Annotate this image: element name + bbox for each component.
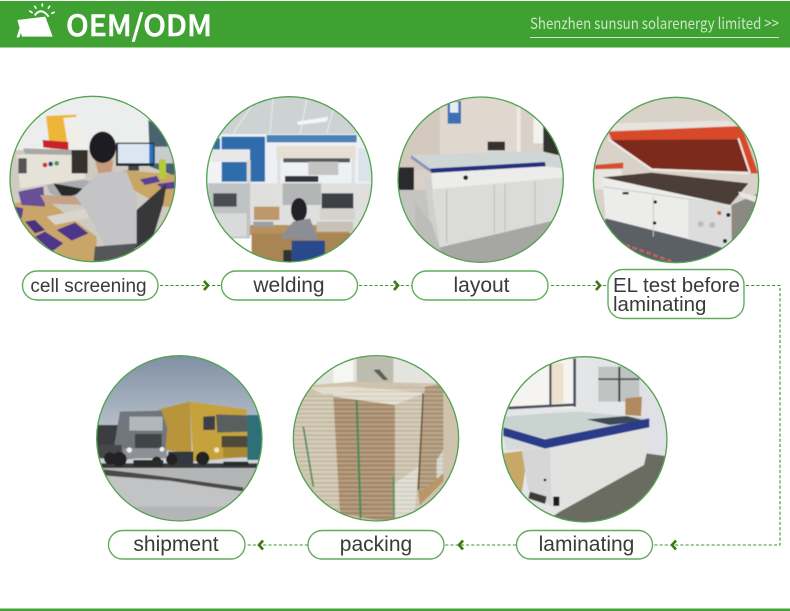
header bar: [0, 1, 790, 48]
footer line: [0, 608, 790, 611]
circle outline: [593, 97, 759, 263]
label: EL test before laminating: EL test before: [613, 274, 740, 297]
label: shipment: shipment: [133, 533, 219, 556]
photo: laminating: [500, 355, 670, 525]
label: EL test before laminating: [608, 270, 744, 318]
label: cell screening: [22, 271, 158, 300]
icon: solar panel with sun: [17, 3, 55, 37]
label: layout: [412, 271, 548, 300]
photo: layout: [395, 93, 568, 267]
photo: cell screening: [7, 93, 180, 267]
label: cell screening: cell screening: [30, 276, 147, 297]
connector: welding to layout: [359, 281, 412, 290]
circle outline: [398, 97, 563, 262]
connector: cell screening to welding: [160, 281, 222, 290]
label: packing: [308, 530, 444, 559]
label: welding: welding: [252, 274, 325, 297]
label: welding: [222, 271, 358, 300]
circle outline: [502, 357, 667, 522]
connector: packing to shipment: [246, 540, 308, 550]
connector: layout to EL test: [551, 281, 608, 290]
label: layout: layout: [453, 274, 510, 297]
circle outline: [97, 356, 262, 521]
connector: laminating to packing: [445, 540, 516, 550]
photo: packing: [290, 353, 462, 527]
label: EL test before laminating: laminating: [613, 293, 706, 316]
label: packing: packing: [340, 533, 412, 556]
label: laminating: [516, 530, 652, 559]
label: shipment: [108, 530, 245, 559]
photo: welding: [203, 93, 377, 265]
photo: EL test: [592, 95, 762, 267]
circle outline: [10, 96, 175, 262]
circle outline: [207, 97, 372, 262]
connector: EL test down to laminating: [654, 286, 780, 550]
photo: shipment: [95, 353, 265, 525]
circle outline: [293, 356, 459, 521]
title: OEM/ODM: [66, 3, 212, 45]
label: laminating: laminating: [539, 533, 634, 556]
